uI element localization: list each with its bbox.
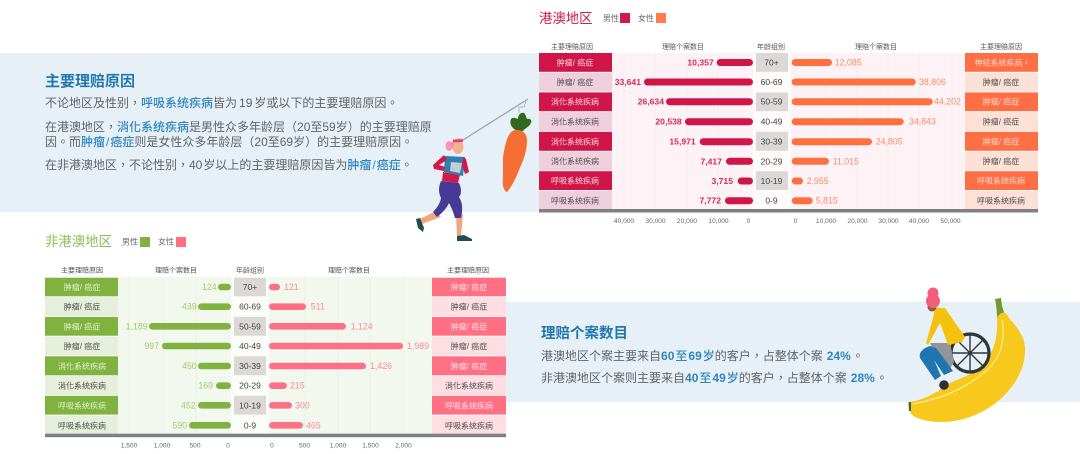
panel: main claim causes background — [0, 53, 539, 212]
text block: claim count — [541, 324, 888, 385]
row 70+: 121 — [284, 282, 299, 292]
row 60-69: 439 — [182, 302, 197, 312]
row 10-19: 10-19 — [239, 400, 261, 410]
row 30-39 — [539, 132, 1038, 151]
row 50-59: 肿瘤/ 癌症 — [983, 97, 1019, 107]
legend: male: 男性 — [122, 236, 138, 246]
row 30-39: 24,805 — [876, 137, 903, 147]
row 70+: 肿瘤/ 癌症 — [64, 282, 100, 292]
row 0-9: 呼吸系统疾病 — [445, 420, 493, 430]
legend: male — [122, 236, 150, 247]
row 70+: 70+ — [764, 58, 779, 68]
axis labels: 20,000 — [847, 218, 868, 225]
axis labels: 30,000 — [645, 218, 666, 225]
column headers: 年龄组别 — [757, 42, 785, 51]
row 60-69: 肿瘤/ 癌症 — [557, 77, 593, 87]
text line 1: 港澳地区个案主要来自60至69岁的客户，占整体个案 24%。 — [541, 348, 864, 363]
column headers: 主要理赔原因 — [447, 266, 489, 274]
legend: female — [638, 13, 666, 23]
text line 4: 在非港澳地区，不论性别，40岁以上的主要理赔原因皆为肿瘤/癌症。 — [45, 157, 413, 172]
legend: female — [158, 236, 186, 247]
row 50-59: 1,124 — [351, 321, 373, 331]
row 70+: 10,357 — [687, 58, 714, 68]
row 20-29: 7,417 — [700, 156, 722, 166]
row 60-69 — [45, 297, 506, 316]
row 40-49: 消化系统疾病 — [551, 116, 599, 126]
axis labels: 0 — [747, 218, 751, 225]
row 30-39: 450 — [182, 361, 197, 371]
carrot — [503, 113, 531, 192]
row 10-19 — [45, 396, 506, 415]
row 60-69: 60-69 — [239, 302, 261, 312]
illustration: runner chasing carrot — [416, 99, 531, 241]
row 50-59: 44,202 — [934, 97, 961, 107]
row 40-49: 肿瘤/ 癌症 — [64, 341, 100, 351]
row 60-69: 33,641 — [615, 77, 641, 87]
column headers: 理赔个案数目 — [662, 42, 704, 51]
row 20-29: 11,015 — [833, 156, 859, 166]
row 20-29: 消化系统疾病 — [551, 156, 599, 166]
row 30-39: 消化系统疾病 — [58, 361, 106, 371]
column headers: 年龄组别 — [236, 266, 264, 274]
runner — [416, 138, 472, 241]
row 70+: 12,085 — [835, 58, 862, 68]
row 20-29: 肿瘤/ 癌症 — [983, 156, 1019, 166]
heading: main claim causes: 主要理赔原因 — [45, 72, 135, 90]
row 50-59: 50-59 — [761, 97, 783, 107]
row 50-59: 消化系统疾病 — [551, 97, 599, 107]
row 10-19: 3,715 — [711, 176, 733, 186]
row 50-59: 26,634 — [638, 97, 664, 107]
axis labels — [614, 218, 961, 225]
row 60-69: 肿瘤/ 癌症 — [64, 302, 100, 312]
row 20-29: 169 — [198, 381, 213, 391]
row 30-39: 30-39 — [239, 361, 261, 371]
row 0-9: 呼吸系统疾病 — [551, 195, 599, 205]
row 20-29 — [45, 376, 506, 395]
column headers: 理赔个案数目 — [855, 42, 897, 51]
row 50-59: 50-59 — [239, 321, 261, 331]
row 60-69: 511 — [311, 302, 325, 312]
axis labels: 40,000 — [909, 218, 929, 225]
row 40-49: 肿瘤/ 癌症 — [983, 116, 1019, 126]
legend: female: 女性 — [638, 13, 654, 23]
axis baseline — [45, 434, 506, 437]
row 0-9: 465 — [306, 420, 321, 430]
text block: main claim causes — [45, 72, 432, 172]
row 60-69 — [539, 73, 1038, 92]
row 20-29: 消化系统疾病 — [445, 381, 493, 391]
row 0-9: 590 — [172, 420, 187, 430]
row 70+: 肿瘤/ 癌症 — [451, 282, 487, 292]
text line 2: 在港澳地区，消化系统疾病是男性众多年龄层（20至59岁）的主要理赔原 — [45, 119, 432, 134]
row 10-19: 452 — [181, 400, 196, 410]
banana — [908, 298, 1025, 422]
row 0-9: 呼吸系统疾病 — [977, 195, 1025, 205]
row 0-9 — [539, 191, 1038, 209]
row 30-39: 30-39 — [761, 137, 783, 147]
row 40-49 — [539, 112, 1038, 131]
row 10-19: 2,955 — [807, 176, 829, 186]
axis labels: 50,000 — [940, 218, 961, 225]
axis labels: 10,000 — [816, 218, 836, 225]
row 40-49: 40-49 — [761, 117, 783, 127]
heading: claim count: 理赔个案数目 — [541, 324, 628, 342]
column headers: 理赔个案数目 — [328, 266, 370, 274]
column headers — [551, 42, 1022, 51]
row 40-49: 40-49 — [239, 341, 261, 351]
axis baseline — [539, 209, 1038, 212]
wheelchair wheel — [951, 334, 989, 372]
row 10-19: 10-19 — [761, 176, 783, 186]
row 40-49 — [45, 337, 506, 355]
illustration: wheelchair user on banana — [908, 288, 1025, 422]
axis labels: 500 — [299, 442, 310, 450]
row 10-19: 300 — [295, 400, 310, 410]
legend: female: 女性 — [158, 236, 174, 246]
row 10-19: 呼吸系统疾病 — [977, 176, 1025, 186]
fishing rod and string — [463, 99, 528, 140]
row 40-49: 34,843 — [909, 117, 936, 127]
axis labels: 0 — [270, 442, 274, 450]
column headers: 主要理赔原因 — [551, 42, 593, 51]
row 10-19: 呼吸系统疾病 — [58, 400, 106, 410]
axis labels: 0 — [226, 442, 230, 450]
row 10-19 — [539, 171, 1038, 190]
text line 1: 不论地区及性别，呼吸系统疾病皆为19岁或以下的主要理赔原因。 — [45, 95, 398, 110]
row 50-59: 肿瘤/ 癌症 — [64, 321, 100, 331]
row 20-29: 20-29 — [239, 381, 261, 391]
row 50-59 — [45, 317, 506, 336]
text line 3: 因。而肿瘤/癌症则是女性众多年龄层（20至69岁）的主要理赔原因。 — [45, 134, 413, 149]
axis labels — [121, 442, 412, 450]
row 0-9: 5,815 — [816, 196, 838, 206]
row 60-69: 60-69 — [761, 77, 783, 87]
row 40-49: 997 — [144, 341, 159, 351]
row 20-29: 215 — [290, 381, 305, 391]
row 0-9: 0-9 — [244, 420, 256, 430]
row 20-29: 消化系统疾病 — [58, 381, 106, 391]
axis labels: 40,000 — [614, 218, 634, 225]
column headers: 主要理赔原因 — [980, 42, 1022, 51]
chart title: 非港澳地区 — [45, 234, 112, 249]
row 70+ — [45, 278, 506, 296]
axis labels: 500 — [189, 442, 201, 450]
row 70+: 神经系统疾病 ¹ — [975, 57, 1028, 67]
row 50-59: 肿瘤/ 癌症 — [451, 321, 487, 331]
row 30-39: 消化系统疾病 — [551, 136, 599, 146]
row 60-69: 肿瘤/ 癌症 — [451, 302, 487, 312]
text line 2: 非港澳地区个案则主要来自40至49岁的客户，占整体个案 28%。 — [541, 370, 888, 385]
person — [920, 288, 965, 392]
row 30-39: 1,426 — [370, 361, 392, 371]
column headers — [61, 266, 489, 274]
axis labels: 1,500 — [362, 442, 379, 450]
row 50-59 — [539, 92, 1038, 111]
row 50-59: 1,189 — [126, 321, 148, 331]
row 30-39: 15,971 — [669, 137, 696, 147]
row 0-9: 7,772 — [699, 196, 721, 206]
column headers: 主要理赔原因 — [61, 266, 103, 274]
axis labels: 2,000 — [395, 442, 412, 450]
axis labels: 30,000 — [878, 218, 899, 225]
axis labels: 0 — [794, 218, 798, 225]
axis labels: 1,000 — [154, 442, 171, 450]
row 20-29: 20-29 — [761, 156, 783, 166]
row 10-19: 呼吸系统疾病 — [551, 176, 599, 186]
row 0-9 — [45, 416, 506, 434]
axis labels: 1,500 — [121, 442, 138, 450]
row 60-69: 38,806 — [919, 77, 946, 87]
row 40-49: 1,989 — [407, 341, 429, 351]
chart: outside Hong Kong and Macau — [45, 234, 506, 450]
row 0-9: 呼吸系统疾病 — [58, 420, 106, 430]
row 30-39: 肿瘤/ 癌症 — [983, 136, 1019, 146]
row 20-29 — [539, 152, 1038, 170]
panel: claim count background — [506, 302, 1080, 402]
row 30-39: 肿瘤/ 癌症 — [451, 361, 487, 371]
row 70+: 肿瘤/ 癌症 — [557, 57, 593, 67]
row 70+: 70+ — [243, 282, 257, 292]
row 40-49: 20,538 — [655, 117, 682, 127]
row 0-9: 0-9 — [765, 196, 778, 206]
column headers: 理赔个案数目 — [155, 266, 197, 274]
axis labels: 20,000 — [677, 218, 697, 225]
legend: male: 男性 — [603, 13, 619, 23]
row 10-19: 呼吸系统疾病 — [445, 400, 493, 410]
row 70+: 124 — [202, 282, 217, 292]
chart: Hong Kong and Macau — [539, 11, 1038, 225]
axis labels: 10,000 — [708, 218, 729, 225]
legend: male — [603, 13, 630, 23]
row 60-69: 肿瘤/ 癌症 — [983, 77, 1019, 87]
chart title: 港澳地区 — [539, 11, 593, 26]
row 30-39 — [45, 356, 506, 375]
axis labels: 1,000 — [330, 442, 347, 450]
row 40-49: 肿瘤/ 癌症 — [451, 341, 487, 351]
row 70+ — [539, 53, 1038, 72]
